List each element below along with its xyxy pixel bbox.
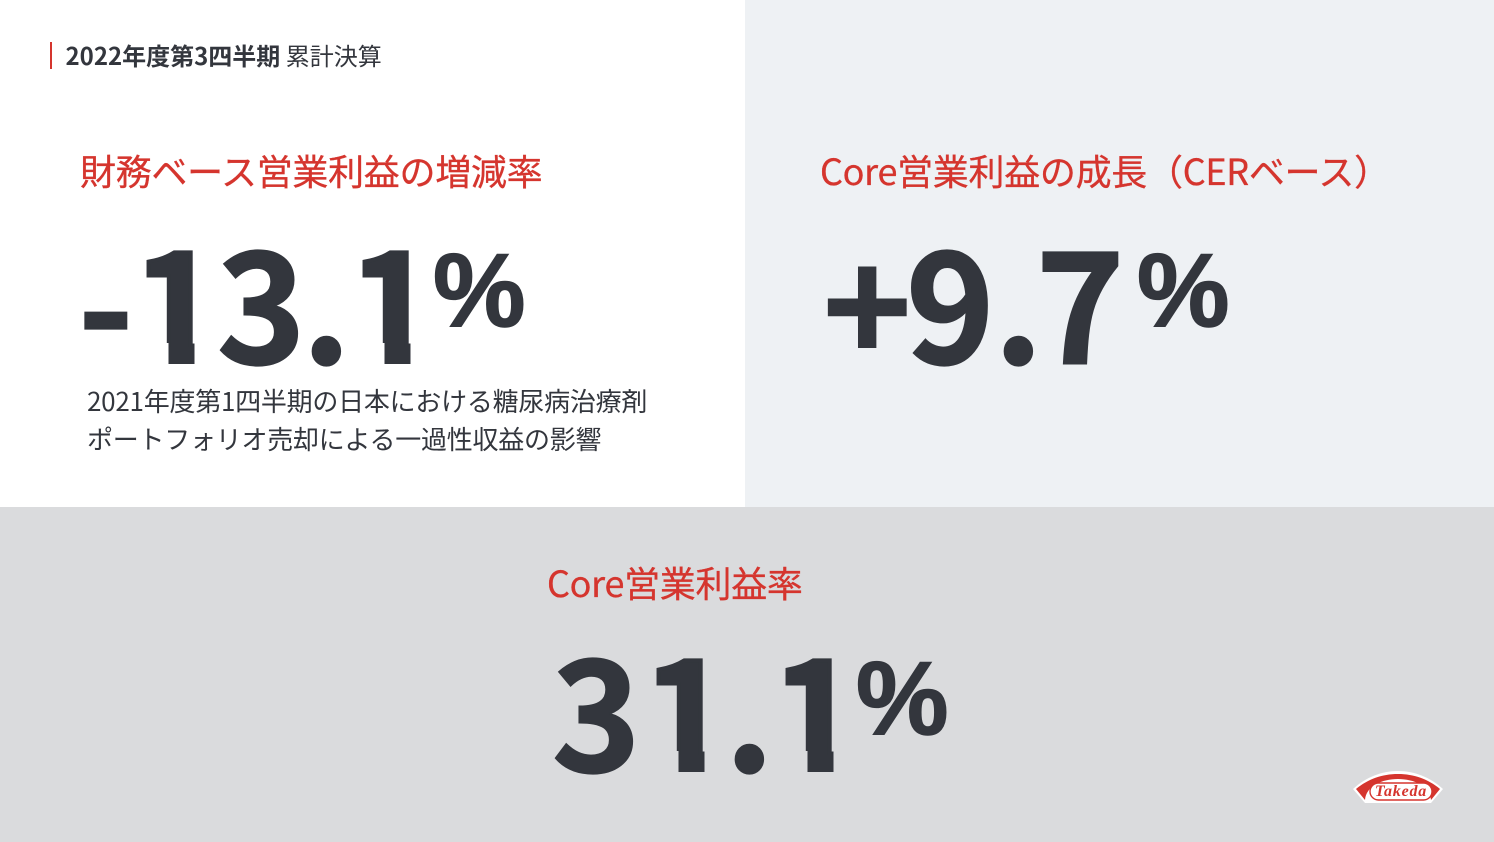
panel: CER growth background	[745, 0, 1494, 507]
title: 2022年度第3四半期 累計決算	[66, 36, 382, 72]
note text: 2021年度第1四半期の日本における糖尿病治療剤	[87, 382, 647, 419]
note text	[87, 382, 647, 457]
heading: reported operating profit change: 財務ベース営業利益の増減率	[80, 144, 542, 196]
heading: core operating profit growth: Core営業利益の成長（CERベース）	[820, 144, 1390, 196]
panel: core margin background	[0, 507, 1494, 842]
icon: Takeda logo	[1353, 771, 1443, 803]
figure: 31.1%: %	[856, 641, 948, 757]
note text: ポートフォリオ売却による一過性収益の影響	[87, 420, 601, 457]
figure: +9.7%: %	[1137, 233, 1229, 349]
heading: core operating margin: Core営業利益率	[547, 556, 803, 608]
figure: 31.1%	[552, 630, 948, 790]
figure: -13.1%	[78, 220, 525, 380]
title accent bar	[50, 42, 52, 69]
figure: -13.1%: %	[433, 233, 525, 349]
icon: Takeda logo: Takeda	[1375, 783, 1427, 800]
